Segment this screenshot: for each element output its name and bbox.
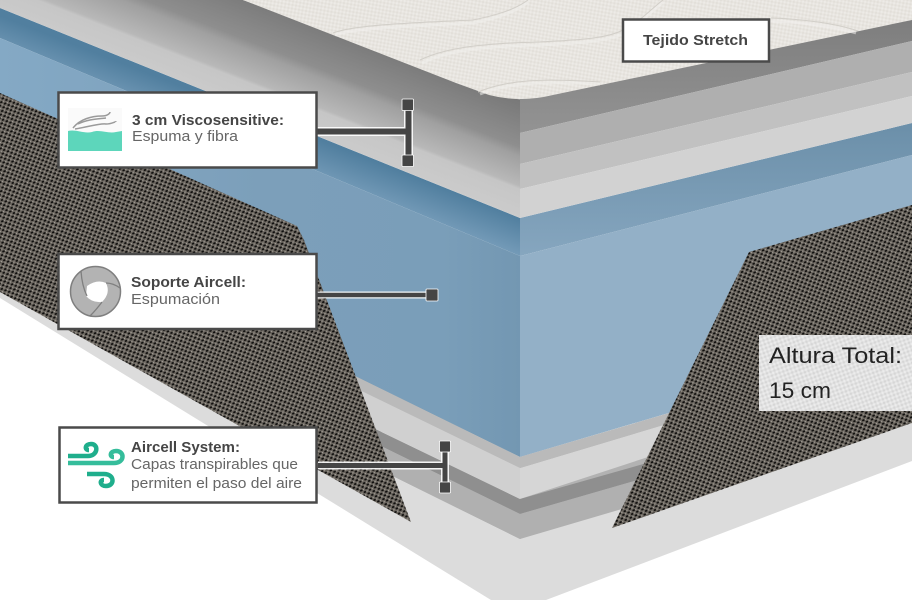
callout: Aircell System: Capas transpirables que — [131, 457, 298, 473]
layers: lower comfort strata — [300, 349, 700, 539]
icon: wind — [68, 444, 123, 486]
icon: hand pressing on foam — [68, 108, 122, 151]
callout: Soporte Aircell: Espumación — [131, 292, 220, 308]
callout: Soporte Aircell — [58, 254, 316, 329]
top fabric: Tejido Stretch quilted cover — [243, 0, 912, 99]
connector: viscosensitive layer bracket — [317, 99, 414, 166]
callout: total height: Altura Total: — [769, 343, 902, 368]
connector: Aircell support pointer — [317, 289, 438, 301]
callout: Soporte Aircell: Soporte Aircell: — [131, 275, 246, 291]
callout: 3 cm Viscosensitive: 3 cm Viscosensitive: — [132, 113, 284, 129]
callout: 3 cm Viscosensitive — [58, 92, 316, 168]
icon: aperture cell — [70, 266, 120, 316]
callout: Tejido Stretch — [623, 20, 769, 62]
callout: total height: 15 cm — [769, 378, 831, 403]
base layer — [0, 286, 912, 600]
callout: Tejido Stretch: Tejido Stretch — [643, 33, 748, 49]
textile cover: right mesh panel — [612, 205, 912, 528]
layer: blue foam block — [0, 8, 912, 457]
layers: upper comfort strata — [0, 0, 912, 218]
callout: Aircell System — [60, 428, 316, 502]
callout: Aircell System: permiten el paso del aire — [131, 476, 302, 492]
callout: total height — [759, 335, 912, 411]
callout: 3 cm Viscosensitive: Espuma y fibra — [132, 129, 239, 145]
callout: Aircell System: Aircell System: — [131, 440, 240, 456]
textile cover: left mesh panel — [0, 93, 411, 522]
connector: Aircell system bracket — [318, 441, 450, 493]
